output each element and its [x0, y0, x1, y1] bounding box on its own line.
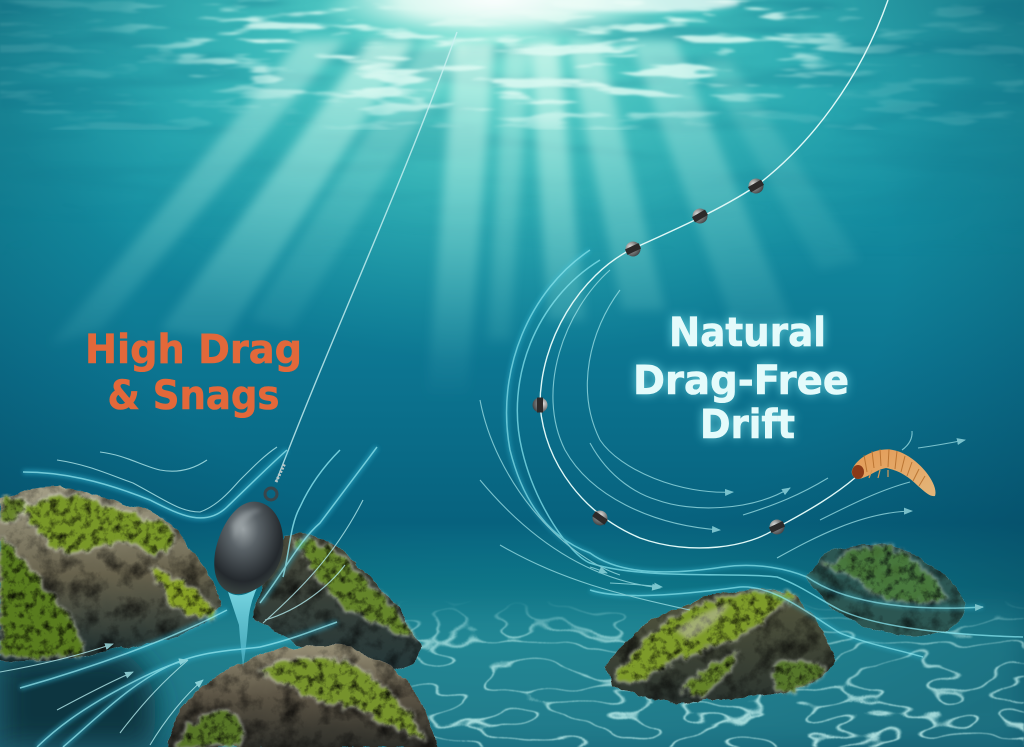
split-shot beads: [532, 176, 787, 537]
heading: High Drag & Snags: [85, 327, 302, 419]
heading: High Drag & Snags: High Drag: [85, 327, 302, 373]
heading: Natural Drag-Free Drift: Natural: [669, 310, 826, 356]
current flow lines: drift side: [480, 250, 1023, 657]
rock: right front: [608, 588, 834, 703]
heading: Natural Drag-Free Drift: Drift: [700, 402, 795, 448]
water surface caustics: [0, 0, 1024, 130]
heading: Natural Drag-Free Drift: [633, 310, 849, 448]
sinker wake: [228, 588, 257, 667]
heading: Natural Drag-Free Drift: Drag-Free: [633, 358, 849, 404]
seabed with light pattern: [110, 602, 1024, 747]
fishing line: sinker rig: [276, 32, 457, 482]
heading: Natural Drag-Free Drift: Natural: [669, 310, 826, 356]
fishing line: natural drift rig: [540, 0, 888, 548]
rock: middle left: [250, 534, 422, 670]
sun rays: [50, 40, 860, 420]
grub bait: [852, 449, 936, 496]
heading: Natural Drag-Free Drift: Drift: [700, 402, 795, 448]
rock: right rear: [807, 544, 967, 635]
sinker with swivel: [214, 463, 285, 594]
heading: Natural Drag-Free Drift: Drag-Free: [633, 358, 849, 404]
rock: large left: [0, 487, 222, 747]
heading: High Drag & Snags: & Snags: [108, 373, 280, 419]
rock: front bottom: [167, 646, 437, 747]
current flow lines: sinker side: [0, 447, 377, 747]
